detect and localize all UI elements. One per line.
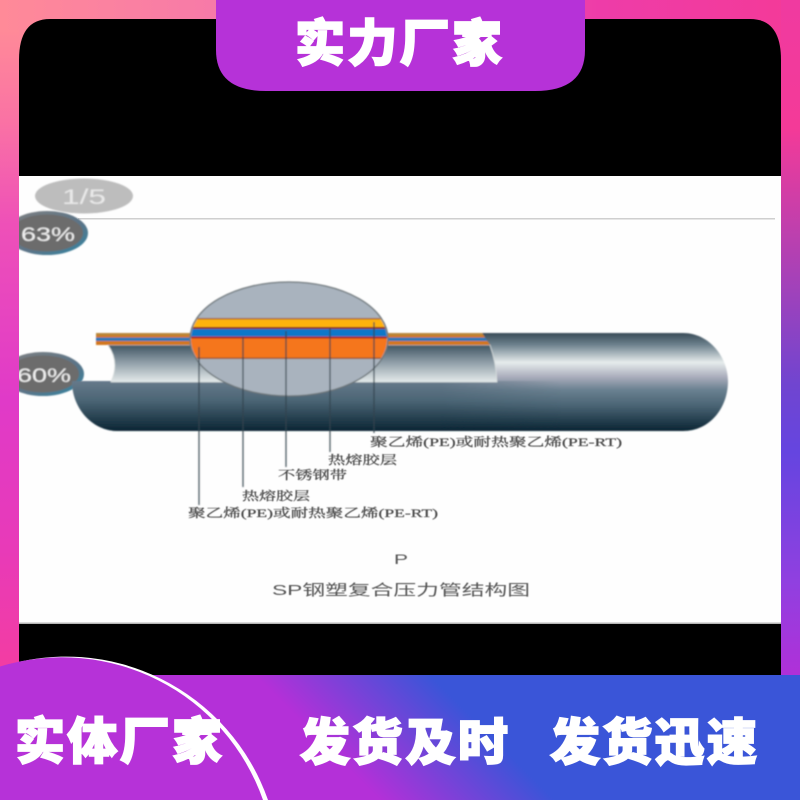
leader lines [199,322,374,505]
page divider line [78,218,775,220]
page indicator pill 1/5 [35,178,133,214]
band text: ships fast: 发货迅速 [550,715,757,771]
progress badge 63%: 63% [21,225,75,246]
layered pipe wall strip [96,333,490,345]
magnified cross-section lens [190,282,388,396]
black photo panel [19,19,781,680]
layer labels [188,434,622,599]
diagram caption: SP钢塑复合压力管结构图 [272,581,530,599]
progress badge 60%: 60% [17,366,71,387]
progress badge 60% [19,351,85,397]
lower front pipe shell [72,381,560,431]
pipe diagram [72,282,728,505]
tab title: 实力厂家 [295,16,502,72]
bottom-left circular badge [0,657,268,800]
product image panel [2,176,781,624]
band text: ships on time: 发货及时 [300,715,508,771]
label: inner PE layer: 聚乙烯(PE)或耐热聚乙烯(PE-RT) [188,505,438,520]
outer pipe body [72,333,728,431]
top tab [216,0,585,91]
label: outer PE layer: 聚乙烯(PE)或耐热聚乙烯(PE-RT) [370,434,622,449]
label: hot melt adhesive lower: 热熔胶层 [242,488,310,503]
badge text: 实体厂家 [15,714,222,770]
inner pipe wall [108,345,497,382]
label: hot melt adhesive upper: 热熔胶层 [328,452,397,467]
page indicator pill 1/5: 1/5 [62,186,106,209]
letter P: P [394,551,408,567]
progress badge 63% [19,210,89,256]
bottom gradient band [0,675,800,800]
label: stainless steel strip: 不锈钢带 [278,467,347,482]
